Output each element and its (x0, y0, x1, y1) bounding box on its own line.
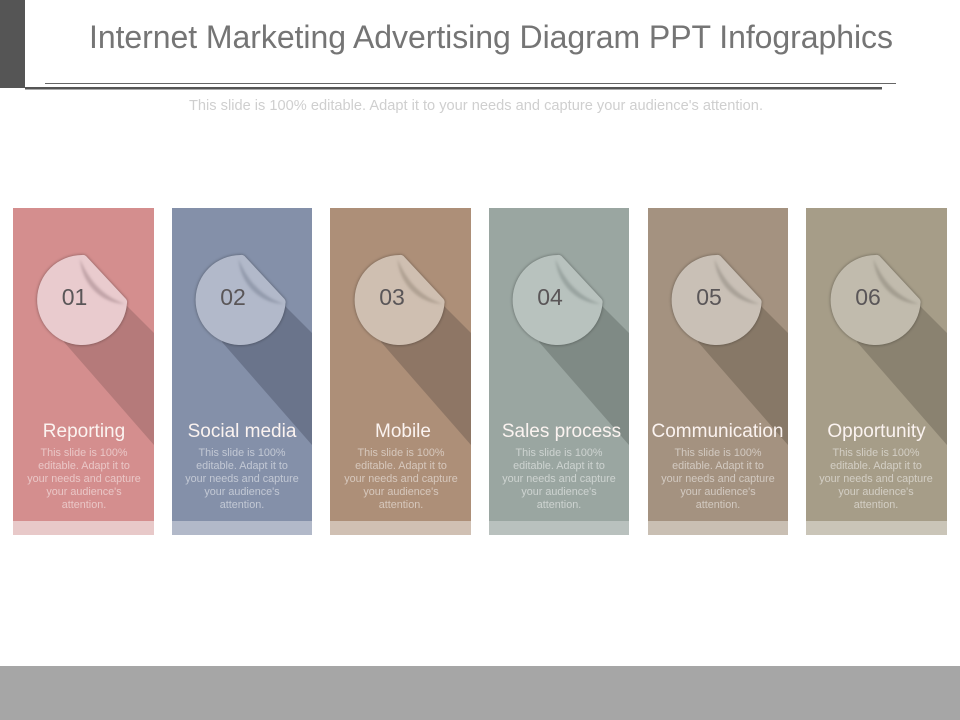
icon: peeled sticker 03 (355, 255, 445, 345)
description: This slide is 100% (515, 447, 603, 459)
long shadow (698, 300, 788, 445)
description: This slide is 100% (674, 447, 762, 459)
icon: peeled sticker 02 (196, 255, 286, 345)
long shadow (381, 300, 471, 445)
description: your needs and capture (661, 473, 775, 485)
description: editable. Adapt it to (355, 460, 447, 472)
description: your audience's (680, 486, 756, 498)
panel: mobile (330, 208, 471, 535)
description: editable. Adapt it to (38, 460, 130, 472)
description: your audience's (838, 486, 914, 498)
icon: peeled sticker 06 (831, 255, 921, 345)
description: editable. Adapt it to (513, 460, 605, 472)
footer band (0, 666, 960, 720)
footer strip (13, 521, 154, 535)
description: editable. Adapt it to (196, 460, 288, 472)
description: This slide is 100% (198, 447, 286, 459)
description: This slide is 100% (357, 447, 445, 459)
icon: peeled sticker 01 (37, 255, 127, 345)
long shadow (64, 300, 154, 445)
description: attention. (220, 499, 264, 511)
label: reporting: Reporting (43, 421, 125, 442)
footer strip (172, 521, 312, 535)
label: social media: Social media (188, 421, 297, 442)
description: attention. (379, 499, 423, 511)
icon: peeled sticker 01: 01 (62, 284, 87, 310)
panel: opportunity (806, 208, 947, 535)
description: editable. Adapt it to (672, 460, 764, 472)
icon: peeled sticker 05: 05 (696, 284, 722, 310)
description: attention. (854, 499, 898, 511)
header rules (25, 83, 896, 90)
header corner block (0, 0, 25, 88)
subtitle: This slide is 100% editable. Adapt it to your needs and capture your audience's attention. (189, 98, 763, 114)
icon: peeled sticker 06: 06 (855, 284, 881, 310)
description: your needs and capture (502, 473, 616, 485)
footer strip (806, 521, 947, 535)
footer strip (489, 521, 629, 535)
long shadow (222, 300, 312, 445)
description: your audience's (363, 486, 439, 498)
icon: peeled sticker 03: 03 (379, 284, 405, 310)
footer strip (648, 521, 788, 535)
panel: reporting (13, 208, 154, 535)
description: editable. Adapt it to (830, 460, 922, 472)
panel: social media (172, 208, 312, 535)
description: your audience's (521, 486, 597, 498)
label: sales process: Sales process (502, 421, 621, 442)
long shadow (857, 300, 947, 445)
label: opportunity: Opportunity (827, 421, 926, 442)
long shadow (539, 300, 629, 445)
description: your needs and capture (27, 473, 141, 485)
icon: peeled sticker 04: 04 (537, 284, 563, 310)
description: your needs and capture (819, 473, 933, 485)
description: your needs and capture (344, 473, 458, 485)
description: attention. (62, 499, 106, 511)
label: mobile: Mobile (375, 421, 431, 442)
panel: sales process (489, 208, 629, 535)
description: This slide is 100% (40, 447, 128, 459)
description: your audience's (46, 486, 122, 498)
icon: peeled sticker 02: 02 (220, 284, 246, 310)
title: Internet Marketing Advertising Diagram PPT Infographics (89, 19, 893, 55)
label: communication: Communication (652, 421, 784, 442)
description: attention. (537, 499, 581, 511)
description: attention. (696, 499, 740, 511)
description: your needs and capture (185, 473, 299, 485)
description: your audience's (204, 486, 280, 498)
description: This slide is 100% (832, 447, 920, 459)
footer strip (330, 521, 471, 535)
icon: peeled sticker 04 (513, 255, 603, 345)
panel: communication (648, 208, 788, 535)
icon: peeled sticker 05 (672, 255, 762, 345)
